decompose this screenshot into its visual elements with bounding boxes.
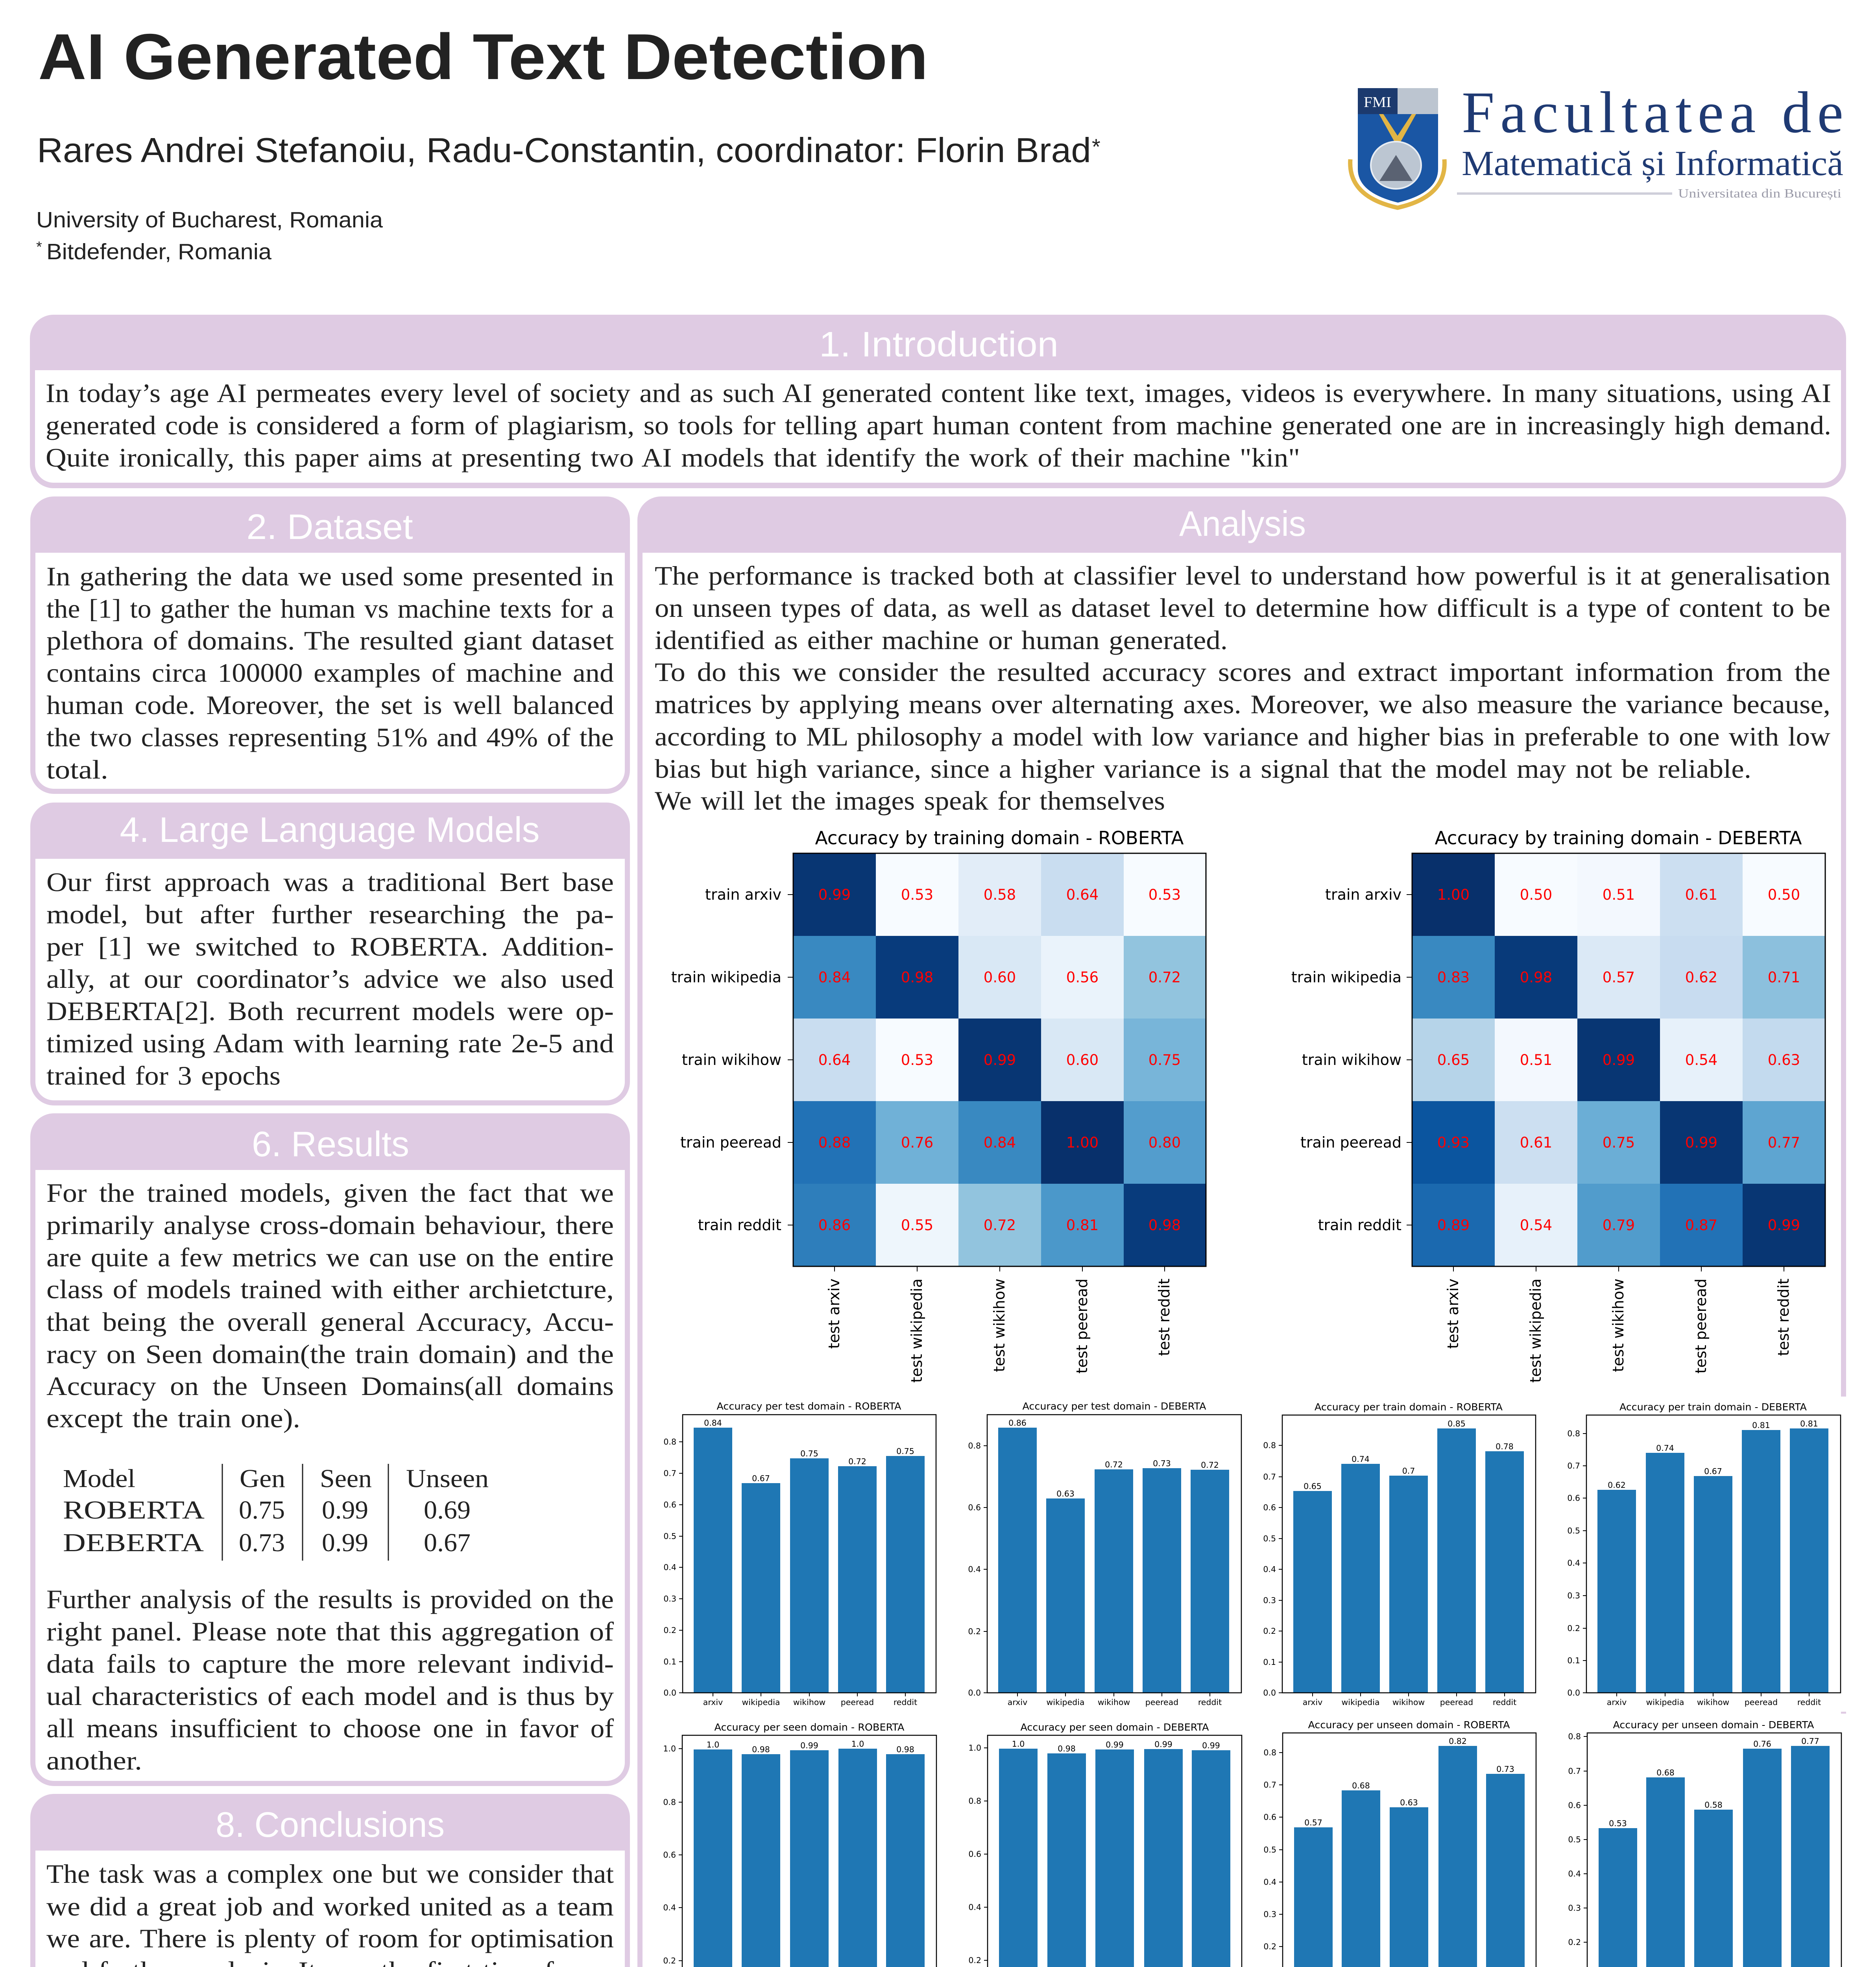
text block: Quite ironically, this paper aims at presenting two AI models that identify the work of their machine "kin" <box>46 443 1300 472</box>
bar chart: accuracy per test domain DEBERTA: 0.72 <box>1201 1460 1219 1470</box>
heatmap: accuracy by training domain DEBERTA: 0.75 <box>1603 1134 1635 1151</box>
bar chart: accuracy per unseen domain ROBERTA: 0.3 <box>1263 1910 1276 1919</box>
bar chart: accuracy per seen domain DEBERTA: 0.6 <box>968 1849 981 1859</box>
heatmap: accuracy by training domain DEBERTA: 0.93 <box>1437 1134 1470 1151</box>
heatmap: accuracy by training domain ROBERTA: test arxiv <box>825 1279 843 1349</box>
heatmap: accuracy by training domain DEBERTA: 0.99 <box>1768 1217 1800 1234</box>
panel: dataset <box>30 496 630 794</box>
text block: ual characteristics of each model and is thus by <box>46 1681 614 1711</box>
heatmap: accuracy by training domain ROBERTA: 0.98 <box>1148 1217 1181 1234</box>
heatmap: accuracy by training domain ROBERTA: test reddit <box>1156 1279 1173 1356</box>
bar chart: accuracy per unseen domain DEBERTA: 0.7 <box>1568 1766 1581 1776</box>
bar chart: accuracy per seen domain ROBERTA: 1.0 <box>851 1739 864 1749</box>
bar chart: accuracy per test domain ROBERTA: 0.3 <box>663 1594 676 1603</box>
text block: human code. Moreover, the set is well balanced <box>46 690 614 720</box>
bar chart: accuracy per test domain DEBERTA: 0.0 <box>968 1688 981 1698</box>
bar chart: accuracy per test domain DEBERTA: arxiv <box>1008 1698 1027 1707</box>
bar chart: accuracy per test domain DEBERTA: 0.72 <box>1105 1460 1123 1469</box>
heatmap: accuracy by training domain ROBERTA: 0.72 <box>1148 969 1181 986</box>
heatmap: accuracy by training domain DEBERTA: 0.62 <box>1685 969 1717 986</box>
bar chart: accuracy per train domain ROBERTA: wikipedia <box>1342 1698 1379 1707</box>
bar chart: accuracy per train domain DEBERTA: arxiv <box>1607 1698 1627 1707</box>
text block: We will let the images speak for themselves <box>655 786 1165 816</box>
text block: Further analysis of the results is provided on the <box>46 1584 614 1614</box>
bar chart: accuracy per test domain ROBERTA: 0.75 <box>800 1449 818 1458</box>
heatmap: accuracy by training domain DEBERTA: 0.50 <box>1520 886 1552 903</box>
bar chart: accuracy per test domain DEBERTA: wikihow <box>1098 1698 1130 1707</box>
bar chart: accuracy per unseen domain ROBERTA: 0.57 <box>1304 1818 1322 1827</box>
heatmap: accuracy by training domain DEBERTA: 0.87 <box>1685 1217 1717 1234</box>
bar chart: accuracy per train domain DEBERTA: peeread <box>1745 1698 1778 1707</box>
bar chart: accuracy per test domain ROBERTA: 0.5 <box>663 1532 676 1541</box>
bar chart: accuracy per seen domain DEBERTA: 0.98 <box>1058 1744 1076 1753</box>
text block: the two classes representing 51% and 49% of the <box>46 722 614 752</box>
bar chart: accuracy per unseen domain ROBERTA: Accuracy per unseen domain - ROBERTA <box>1308 1719 1510 1731</box>
icon: university shield <box>1350 88 1444 208</box>
bar chart: accuracy per unseen domain ROBERTA: 0.4 <box>1263 1877 1276 1887</box>
bar chart: accuracy per unseen domain DEBERTA <box>1568 1719 1841 1967</box>
bar chart: accuracy per test domain ROBERTA: peeread <box>841 1698 874 1707</box>
bar chart: accuracy per test domain ROBERTA: 0.8 <box>663 1437 676 1447</box>
bar chart: accuracy per test domain ROBERTA: 0.0 <box>663 1688 676 1698</box>
heatmap: accuracy by training domain DEBERTA: 0.83 <box>1437 969 1470 986</box>
bar chart: accuracy per train domain DEBERTA: 0.3 <box>1567 1591 1580 1600</box>
bar chart: accuracy per seen domain DEBERTA: 1.0 <box>1012 1739 1025 1749</box>
heatmap: accuracy by training domain DEBERTA: train reddit <box>1318 1216 1401 1234</box>
bar chart: accuracy per test domain ROBERTA: reddit <box>894 1698 917 1707</box>
bar chart: accuracy per train domain DEBERTA: wikihow <box>1697 1698 1729 1707</box>
bar chart: accuracy per unseen domain ROBERTA <box>1263 1719 1536 1967</box>
bar chart: accuracy per test domain ROBERTA: 0.7 <box>663 1469 676 1478</box>
bar chart: accuracy per train domain ROBERTA: 0.3 <box>1263 1596 1276 1605</box>
table: model results: 0.99 <box>322 1528 368 1557</box>
table: model results: DEBERTA <box>63 1528 204 1557</box>
heatmap: accuracy by training domain DEBERTA: 0.57 <box>1603 969 1635 986</box>
bar chart: accuracy per test domain ROBERTA: wikipedia <box>742 1698 780 1707</box>
bar chart: accuracy per unseen domain DEBERTA: 0.58 <box>1704 1800 1723 1810</box>
heatmap: accuracy by training domain DEBERTA: train wikipedia <box>1291 969 1401 986</box>
heatmap: accuracy by training domain ROBERTA: 0.60 <box>1066 1052 1099 1068</box>
text block: class of models trained with either archietcture, <box>46 1274 614 1304</box>
panel: introduction <box>30 315 1846 488</box>
bar chart: accuracy per seen domain ROBERTA: 0.98 <box>752 1745 770 1754</box>
logo: Facultatea de Matematica si Informatica: Facultatea de <box>1462 80 1843 145</box>
heatmap: accuracy by training domain DEBERTA: 0.51 <box>1520 1052 1552 1068</box>
heatmap: accuracy by training domain ROBERTA: 1.00 <box>1066 1134 1099 1151</box>
heatmap: accuracy by training domain ROBERTA: 0.60 <box>984 969 1016 986</box>
logo: Facultatea de Matematica si Informatica <box>1350 80 1843 208</box>
text block: To do this we consider the resulted accuracy scores and extract important information from the <box>655 657 1830 687</box>
bar chart: accuracy per train domain DEBERTA: 0.5 <box>1567 1526 1580 1535</box>
table: model results: Unseen <box>406 1464 489 1493</box>
bar chart: accuracy per test domain DEBERTA: 0.2 <box>968 1627 981 1636</box>
text block: model, but after further researching the pa- <box>46 899 614 929</box>
bar chart: accuracy per unseen domain DEBERTA: 0.76 <box>1753 1739 1771 1749</box>
affiliations: * <box>36 239 42 255</box>
heatmap: accuracy by training domain ROBERTA: 0.53 <box>1148 886 1181 903</box>
heatmap: accuracy by training domain DEBERTA: 0.71 <box>1768 969 1800 986</box>
bar chart: accuracy per train domain ROBERTA: 0.65 <box>1304 1482 1322 1491</box>
bar chart: accuracy per train domain ROBERTA: reddit <box>1493 1698 1516 1707</box>
logo: Facultatea de Matematica si Informatica: Matematică și Informatică <box>1462 144 1843 183</box>
panel: conclusions <box>30 1794 630 1967</box>
text block <box>46 1584 614 1775</box>
heatmap: accuracy by training domain DEBERTA: test wikihow <box>1610 1279 1627 1372</box>
table: model results: 0.73 <box>239 1528 285 1557</box>
affiliations <box>36 207 383 264</box>
heatmap: accuracy by training domain DEBERTA: 0.89 <box>1437 1217 1470 1234</box>
heatmap: accuracy by training domain ROBERTA <box>671 827 1206 1383</box>
text block: total. <box>46 755 108 784</box>
text block: DEBERTA[2]. Both recurrent models were op- <box>46 996 614 1026</box>
bar chart: accuracy per test domain DEBERTA: Accuracy per test domain - DEBERTA <box>1022 1401 1206 1412</box>
heatmap: accuracy by training domain DEBERTA: test peeread <box>1692 1279 1710 1374</box>
table: model results: Gen <box>240 1464 285 1493</box>
bar chart: accuracy per test domain ROBERTA: 0.1 <box>663 1657 676 1666</box>
text block: bias but high variance, since a higher variance is a signal that the model may not be reliable. <box>655 754 1751 784</box>
table: model results: Model <box>63 1464 135 1493</box>
heatmap: accuracy by training domain DEBERTA: 0.61 <box>1520 1134 1552 1151</box>
text block <box>46 561 614 784</box>
text block: are quite a few metrics we can use on the entire <box>46 1242 614 1272</box>
bar chart: accuracy per test domain DEBERTA: 0.63 <box>1056 1489 1075 1498</box>
heatmap: accuracy by training domain ROBERTA: 0.99 <box>984 1052 1016 1068</box>
heatmap: accuracy by training domain DEBERTA: train peeread <box>1300 1134 1401 1151</box>
heatmap: accuracy by training domain ROBERTA: Accuracy by training domain - ROBERTA <box>815 827 1184 849</box>
text block: another. <box>46 1746 142 1775</box>
bar chart: accuracy per test domain DEBERTA: 0.73 <box>1153 1459 1171 1468</box>
heatmap: accuracy by training domain DEBERTA: 0.63 <box>1768 1052 1800 1068</box>
heatmap: accuracy by training domain ROBERTA: 0.80 <box>1148 1134 1181 1151</box>
bar chart: accuracy per train domain DEBERTA: 0.1 <box>1567 1656 1580 1665</box>
heatmap: accuracy by training domain DEBERTA: 0.54 <box>1685 1052 1717 1068</box>
text block: ally, at our coordinator’s advice we also used <box>46 964 614 994</box>
bar chart: accuracy per seen domain ROBERTA: 0.8 <box>663 1797 676 1807</box>
bar chart: accuracy per seen domain DEBERTA: 1.0 <box>968 1743 981 1753</box>
heatmap: accuracy by training domain ROBERTA: train peeread <box>680 1134 781 1151</box>
bar chart: accuracy per unseen domain ROBERTA: 0.7 <box>1263 1780 1276 1790</box>
bar chart: accuracy per test domain ROBERTA: Accuracy per test domain - ROBERTA <box>717 1401 901 1412</box>
heatmap: accuracy by training domain DEBERTA: test reddit <box>1775 1279 1792 1356</box>
heatmap: accuracy by training domain ROBERTA: 0.64 <box>1066 886 1099 903</box>
title: AI Generated Text Detection <box>38 20 928 93</box>
bar chart: accuracy per test domain ROBERTA: 0.72 <box>848 1457 866 1466</box>
heading: 8. Conclusions <box>216 1805 445 1845</box>
bar chart: accuracy per train domain DEBERTA: 0.6 <box>1567 1493 1580 1503</box>
bar chart: accuracy per train domain ROBERTA: peeread <box>1440 1698 1473 1707</box>
heatmap: accuracy by training domain ROBERTA: 0.64 <box>818 1052 851 1068</box>
bar chart: accuracy per train domain ROBERTA <box>1263 1401 1536 1707</box>
bar chart: accuracy per train domain ROBERTA: 0.4 <box>1263 1565 1276 1574</box>
bar chart: accuracy per unseen domain DEBERTA: 0.4 <box>1568 1869 1581 1878</box>
heatmap: accuracy by training domain DEBERTA: 0.79 <box>1603 1217 1635 1234</box>
table: model results: Seen <box>320 1464 372 1493</box>
bar chart: accuracy per test domain ROBERTA: 0.6 <box>663 1500 676 1509</box>
bar chart: accuracy per train domain DEBERTA: 0.7 <box>1567 1461 1580 1471</box>
bar chart: accuracy per test domain DEBERTA: 0.6 <box>968 1503 981 1512</box>
bar chart: accuracy per unseen domain DEBERTA: 0.6 <box>1568 1801 1581 1810</box>
heatmap: accuracy by training domain ROBERTA: train arxiv <box>705 886 781 903</box>
bar chart: accuracy per test domain DEBERTA: peeread <box>1145 1698 1178 1707</box>
text block: we did a great job and worked united as a team <box>46 1891 614 1921</box>
bar chart: accuracy per seen domain ROBERTA: 0.99 <box>800 1741 818 1750</box>
text block: plethora of domains. The resulted giant dataset <box>46 626 614 655</box>
bar chart: accuracy per seen domain DEBERTA: 0.99 <box>1154 1740 1172 1749</box>
heatmap: accuracy by training domain DEBERTA: Accuracy by training domain - DEBERTA <box>1435 827 1802 849</box>
bar chart: accuracy per test domain ROBERTA: 0.75 <box>896 1447 914 1456</box>
text block: generated code is considered a form of plagiarism, so tools for telling apart human content from machine generated one are in increasingly high demand. <box>46 410 1831 440</box>
bar chart: accuracy per train domain DEBERTA: 0.81 <box>1752 1421 1770 1430</box>
heading: 2. Dataset <box>246 507 413 547</box>
bar chart: accuracy per unseen domain ROBERTA: 0.6 <box>1263 1812 1276 1822</box>
icon: university shield: FMI <box>1364 94 1391 111</box>
heatmap: accuracy by training domain ROBERTA: test wikihow <box>991 1279 1008 1372</box>
heatmap: accuracy by training domain DEBERTA: test wikipedia <box>1527 1279 1544 1383</box>
text block: trained for 3 epochs <box>46 1061 281 1091</box>
bar chart: accuracy per train domain ROBERTA: 0.1 <box>1263 1657 1276 1667</box>
logo: Facultatea de Matematica si Informatica: Universitatea din București <box>1678 186 1841 200</box>
bar chart: accuracy per train domain DEBERTA: wikipedia <box>1646 1698 1684 1707</box>
text block: identified as either machine or human generated. <box>655 625 1228 655</box>
text block: the [1] to gather the human vs machine texts for a <box>46 594 614 624</box>
heatmap: accuracy by training domain DEBERTA: 0.77 <box>1768 1134 1800 1151</box>
heatmap: accuracy by training domain ROBERTA: 0.86 <box>818 1217 851 1234</box>
bar chart: accuracy per seen domain ROBERTA: 0.4 <box>663 1903 676 1912</box>
heatmap: accuracy by training domain ROBERTA: train reddit <box>698 1216 781 1234</box>
bar chart: accuracy per test domain ROBERTA <box>663 1401 936 1707</box>
text block: all means insufficient to choose one in favor of <box>46 1713 614 1743</box>
heatmap: accuracy by training domain ROBERTA: 0.72 <box>984 1217 1016 1234</box>
bar chart: accuracy per train domain ROBERTA: 0.6 <box>1263 1503 1276 1512</box>
heatmap: accuracy by training domain ROBERTA: 0.88 <box>818 1134 851 1151</box>
authors: Rares Andrei Stefanoiu, Radu-Constantin, coordinator: Florin Brad <box>37 131 1091 170</box>
text block <box>46 1178 614 1433</box>
heatmap: accuracy by training domain DEBERTA: 0.51 <box>1603 886 1635 903</box>
bar chart: accuracy per train domain ROBERTA: 0.74 <box>1352 1454 1370 1464</box>
bar chart: accuracy per unseen domain ROBERTA: 0.63 <box>1400 1798 1418 1807</box>
bar chart: accuracy per test domain DEBERTA: 0.4 <box>968 1565 981 1574</box>
heatmap: accuracy by training domain ROBERTA: 0.56 <box>1066 969 1099 986</box>
bar chart: accuracy per seen domain DEBERTA: 0.99 <box>1202 1741 1220 1750</box>
text block: matrices by applying means over alternating axes. Moreover, we also measure the variance because, <box>655 689 1830 719</box>
bar chart: accuracy per seen domain DEBERTA: 0.8 <box>968 1796 981 1806</box>
bar chart: accuracy per train domain DEBERTA: 0.74 <box>1656 1443 1674 1453</box>
text block: according to ML philosophy a model with low variance and higher bias in preferable to one with low <box>655 721 1830 751</box>
bar chart: accuracy per test domain ROBERTA: arxiv <box>703 1698 723 1707</box>
heatmap: accuracy by training domain DEBERTA: 1.00 <box>1437 886 1470 903</box>
bar chart: accuracy per train domain ROBERTA: 0.7 <box>1263 1472 1276 1482</box>
bar chart: accuracy per seen domain DEBERTA: 0.2 <box>968 1956 981 1965</box>
table: model results: 0.69 <box>424 1496 471 1524</box>
text block <box>46 378 1831 472</box>
bar chart: accuracy per test domain DEBERTA: reddit <box>1198 1698 1222 1707</box>
text block: right panel. Please note that this aggregation of <box>46 1616 614 1646</box>
bar chart: accuracy per test domain DEBERTA: wikipedia <box>1047 1698 1084 1707</box>
affiliations: Bitdefender, Romania <box>46 239 271 264</box>
bar chart: accuracy per seen domain ROBERTA: 0.2 <box>663 1956 676 1965</box>
bar chart: accuracy per test domain DEBERTA: 0.86 <box>1008 1418 1027 1428</box>
bar chart: accuracy per test domain DEBERTA: 0.8 <box>968 1441 981 1450</box>
bar chart: accuracy per seen domain ROBERTA: 0.6 <box>663 1850 676 1860</box>
heading: 1. Introduction <box>819 325 1058 364</box>
text block: The performance is tracked both at classifier level to understand how powerful is it at generalisation <box>655 561 1830 590</box>
bar chart: accuracy per train domain DEBERTA: Accuracy per train domain - DEBERTA <box>1619 1401 1807 1413</box>
bar chart: accuracy per unseen domain DEBERTA: 0.2 <box>1568 1937 1581 1947</box>
bar chart: accuracy per train domain DEBERTA: 0.8 <box>1567 1429 1580 1438</box>
text block: on unseen types of data, as well as dataset level to determine how difficult is a type of content to be <box>655 593 1830 623</box>
bar chart: accuracy per seen domain DEBERTA: 0.99 <box>1106 1740 1124 1749</box>
table: model results: 0.67 <box>424 1528 471 1557</box>
table: model results: ROBERTA <box>63 1496 205 1524</box>
text block <box>46 867 614 1091</box>
bar chart: accuracy per train domain ROBERTA: 0.5 <box>1263 1534 1276 1543</box>
bar chart: accuracy per test domain ROBERTA: wikihow <box>793 1698 825 1707</box>
bar chart: accuracy per train domain ROBERTA: Accuracy per train domain - ROBERTA <box>1315 1401 1503 1413</box>
text block: per [1] we switched to ROBERTA. Addition- <box>46 932 614 961</box>
panel: large language models <box>30 803 630 1105</box>
text block: racy on Seen domain(the train domain) and the <box>46 1339 614 1369</box>
bar chart: accuracy per test domain ROBERTA: 0.67 <box>752 1474 770 1483</box>
heatmap: accuracy by training domain DEBERTA: train wikihow <box>1302 1051 1401 1068</box>
bar chart: accuracy per seen domain ROBERTA: 1.0 <box>663 1744 676 1753</box>
table: model results: 0.75 <box>239 1496 285 1524</box>
bar chart: accuracy per unseen domain DEBERTA: 0.77 <box>1801 1736 1819 1746</box>
bar chart: accuracy per train domain ROBERTA: 0.2 <box>1263 1626 1276 1636</box>
text block: timized using Adam with learning rate 2e-5 and <box>46 1028 614 1058</box>
heatmap: accuracy by training domain ROBERTA: test peeread <box>1073 1279 1091 1374</box>
text block: In gathering the data we used some presented in <box>46 561 614 591</box>
bar chart: accuracy per unseen domain DEBERTA: 0.5 <box>1568 1835 1581 1844</box>
panel: results <box>30 1113 630 1786</box>
bar chart: accuracy per unseen domain ROBERTA: 0.82 <box>1449 1736 1467 1746</box>
panel: analysis <box>637 496 1846 1967</box>
text block: For the trained models, given the fact that we <box>46 1178 614 1208</box>
bar chart: accuracy per seen domain ROBERTA: 1.0 <box>707 1740 719 1749</box>
bar chart: accuracy per unseen domain ROBERTA: 0.5 <box>1263 1845 1276 1854</box>
table: model results <box>63 1464 489 1561</box>
bar chart: accuracy per unseen domain DEBERTA: 0.8 <box>1568 1732 1581 1741</box>
heatmap: accuracy by training domain DEBERTA: 0.50 <box>1768 886 1800 903</box>
bar chart: accuracy per train domain ROBERTA: 0.7 <box>1402 1466 1415 1476</box>
text block <box>655 561 1830 816</box>
bar chart: accuracy per unseen domain ROBERTA: 0.8 <box>1263 1748 1276 1757</box>
table: model results: 0.99 <box>322 1496 368 1524</box>
heatmap: accuracy by training domain ROBERTA: 0.81 <box>1066 1217 1099 1234</box>
heatmap: accuracy by training domain DEBERTA: 0.99 <box>1603 1052 1635 1068</box>
bar chart: accuracy per test domain DEBERTA <box>968 1401 1241 1707</box>
bar chart: accuracy per unseen domain ROBERTA: 0.2 <box>1263 1942 1276 1951</box>
heatmap: accuracy by training domain ROBERTA: 0.98 <box>901 969 933 986</box>
authors: * <box>1092 134 1100 159</box>
text block: Accuracy on the Unseen Domains(all domains <box>46 1371 614 1401</box>
bar chart: accuracy per test domain ROBERTA: 0.2 <box>663 1626 676 1635</box>
bar chart: accuracy per test domain ROBERTA: 0.4 <box>663 1563 676 1572</box>
text block: that being the overall general Accuracy, Accu- <box>46 1307 614 1337</box>
heatmap: accuracy by training domain ROBERTA: 0.53 <box>901 1052 933 1068</box>
text block: we are. There is plenty of room for optimisation <box>46 1923 614 1953</box>
bar chart: accuracy per train domain ROBERTA: 0.8 <box>1263 1441 1276 1450</box>
bar chart: accuracy per train domain ROBERTA: 0.85 <box>1448 1419 1466 1428</box>
bar chart: accuracy per unseen domain DEBERTA: 0.53 <box>1609 1819 1627 1828</box>
heatmap: accuracy by training domain ROBERTA: 0.99 <box>818 886 851 903</box>
heatmap: accuracy by training domain DEBERTA: 0.98 <box>1520 969 1552 986</box>
heading: Analysis <box>1179 504 1306 544</box>
bar chart: accuracy per seen domain DEBERTA <box>968 1722 1242 1967</box>
bar chart: accuracy per train domain DEBERTA: 0.2 <box>1567 1624 1580 1633</box>
text block: Our first approach was a traditional Bert base <box>46 867 614 897</box>
heading: 4. Large Language Models <box>120 810 540 850</box>
heatmap: accuracy by training domain ROBERTA: 0.55 <box>901 1217 933 1234</box>
bar chart: accuracy per train domain ROBERTA: 0.0 <box>1263 1688 1276 1698</box>
heatmap: accuracy by training domain DEBERTA: train arxiv <box>1325 886 1401 903</box>
bar chart: accuracy per train domain ROBERTA: wikihow <box>1392 1698 1425 1707</box>
bar chart: accuracy per train domain DEBERTA: reddit <box>1797 1698 1821 1707</box>
bar chart: accuracy per test domain ROBERTA: 0.84 <box>704 1418 722 1428</box>
bar chart: accuracy per seen domain DEBERTA: Accuracy per seen domain - DEBERTA <box>1021 1722 1209 1733</box>
bar chart: accuracy per seen domain ROBERTA <box>663 1722 936 1967</box>
bar chart: accuracy per train domain DEBERTA: 0.62 <box>1608 1480 1626 1490</box>
text block: In today’s age AI permeates every level of society and as such AI generated content like text, images, videos is everywhere. In many situations, using AI <box>46 378 1831 408</box>
heatmap: accuracy by training domain ROBERTA: 0.53 <box>901 886 933 903</box>
heatmap: accuracy by training domain DEBERTA <box>1291 827 1825 1383</box>
bar chart: accuracy per seen domain ROBERTA: Accuracy per seen domain - ROBERTA <box>715 1722 904 1733</box>
text block: The task was a complex one but we consider that <box>46 1859 614 1889</box>
text block: except the train one). <box>46 1403 300 1433</box>
heatmap: accuracy by training domain DEBERTA: 0.65 <box>1437 1052 1470 1068</box>
bar chart: accuracy per unseen domain DEBERTA: 0.68 <box>1656 1768 1675 1777</box>
heatmap: accuracy by training domain ROBERTA: 0.84 <box>984 1134 1016 1151</box>
bar chart: accuracy per train domain ROBERTA: arxiv <box>1303 1698 1322 1707</box>
heatmap: accuracy by training domain DEBERTA: 0.99 <box>1685 1134 1717 1151</box>
heatmap: accuracy by training domain DEBERTA: 0.61 <box>1685 886 1717 903</box>
bar chart: accuracy per unseen domain ROBERTA: 0.68 <box>1352 1781 1370 1790</box>
text block <box>46 1859 614 1967</box>
heading: 6. Results <box>252 1125 409 1164</box>
bar chart: accuracy per seen domain ROBERTA: 0.98 <box>896 1745 914 1754</box>
heatmap: accuracy by training domain DEBERTA: test arxiv <box>1444 1279 1462 1349</box>
bar chart: accuracy per seen domain DEBERTA: 0.4 <box>968 1902 981 1912</box>
bar chart: accuracy per train domain DEBERTA: 0.0 <box>1567 1688 1580 1698</box>
bar chart: accuracy per train domain ROBERTA: 0.78 <box>1496 1442 1514 1451</box>
heatmap: accuracy by training domain ROBERTA: 0.75 <box>1148 1052 1181 1068</box>
bar chart: accuracy per train domain DEBERTA: 0.81 <box>1800 1419 1818 1428</box>
text block: contains circa 100000 examples of machine and <box>46 658 614 688</box>
heatmap: accuracy by training domain ROBERTA: 0.58 <box>984 886 1016 903</box>
affiliations: University of Bucharest, Romania <box>36 207 383 232</box>
bar chart: accuracy per unseen domain DEBERTA: 0.3 <box>1568 1903 1581 1913</box>
heatmap: accuracy by training domain ROBERTA: test wikipedia <box>908 1279 925 1383</box>
bar chart: accuracy per unseen domain ROBERTA: 0.73 <box>1496 1764 1514 1774</box>
heatmap: accuracy by training domain ROBERTA: train wikihow <box>682 1051 781 1068</box>
bar chart: accuracy per train domain DEBERTA: 0.4 <box>1567 1558 1580 1568</box>
heatmap: accuracy by training domain ROBERTA: 0.84 <box>818 969 851 986</box>
heatmap: accuracy by training domain ROBERTA: train wikipedia <box>671 969 781 986</box>
bar chart: accuracy per train domain DEBERTA <box>1567 1401 1841 1707</box>
text block: primarily analyse cross-domain behaviour, there <box>46 1210 614 1240</box>
bar chart: accuracy per unseen domain DEBERTA: Accuracy per unseen domain - DEBERTA <box>1613 1719 1814 1731</box>
text block: data fails to capture the more relevant individ- <box>46 1649 614 1679</box>
heatmap: accuracy by training domain ROBERTA: 0.76 <box>901 1134 933 1151</box>
heatmap: accuracy by training domain DEBERTA: 0.54 <box>1520 1217 1552 1234</box>
bar chart: accuracy per train domain DEBERTA: 0.67 <box>1704 1467 1722 1476</box>
